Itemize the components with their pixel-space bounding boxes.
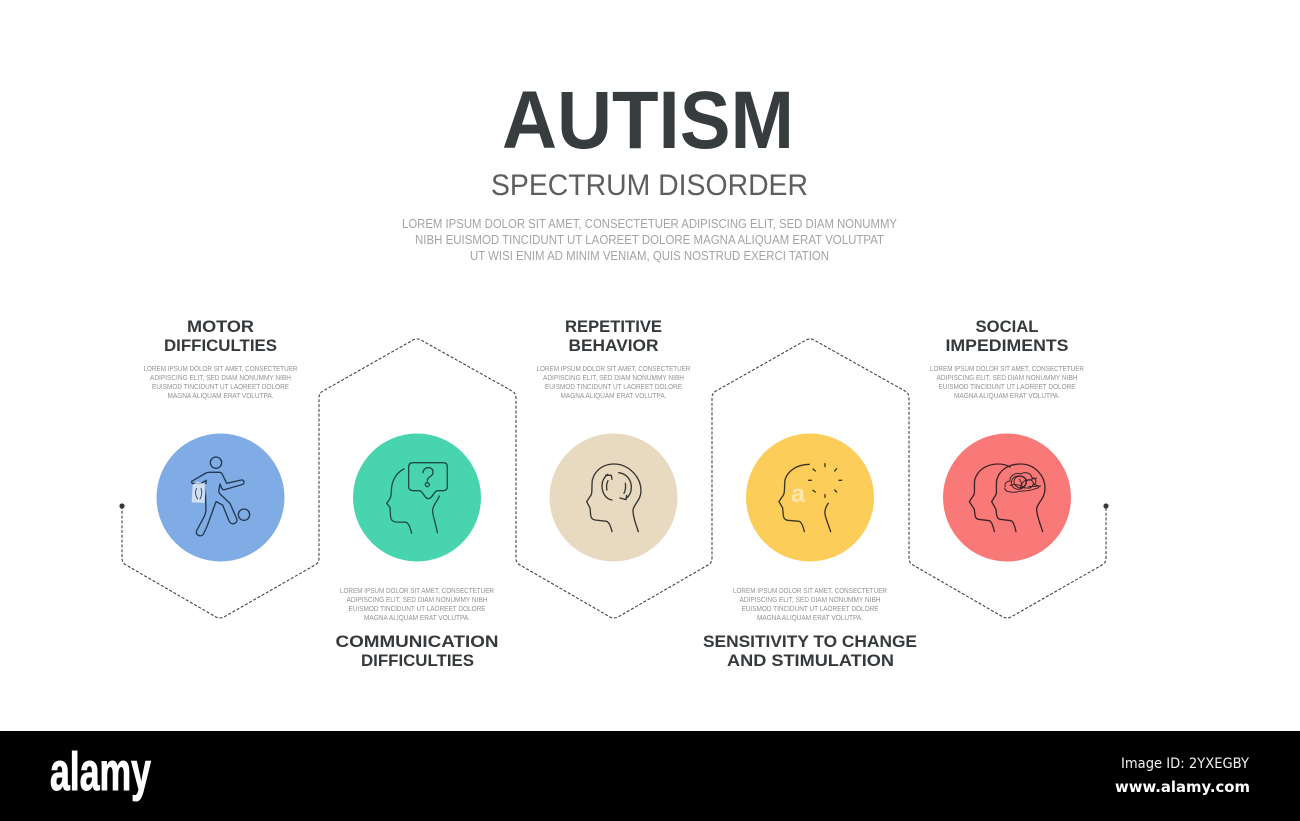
text: motor difficulties description: MAGNA ALIQUAM ERAT VOLUTPA. [168,391,274,400]
text: social impediments description: ADIPISCING ELIT, SED DIAM NONUMMY NIBH [936,373,1078,382]
icon circle: blue [156,434,284,562]
heading: social impediments [946,317,1068,355]
subtitle: SPECTRUM DISORDER [491,169,808,202]
text: communication difficulties description: LOREM IPSUM DOLOR SIT AMET, CONSECTETUER [340,586,494,595]
text: communication difficulties description: ADIPISCING ELIT, SED DIAM NONUMMY NIBH [346,595,488,604]
intro text: NIBH EUISMOD TINCIDUNT UT LAOREET DOLORE MAGNA ALIQUAM ERAT VOLUTPAT [415,232,884,247]
panel: social impediments [930,317,1084,562]
heading: motor difficulties: MOTOR [187,317,254,336]
heading: social impediments: SOCIAL [976,317,1038,336]
intro text: UT WISI ENIM AD MINIM VENIAM, QUIS NOSTRUD EXERCI TATION [470,248,829,263]
text: communication difficulties description: EUISMOD TINCIDUNT UT LAOREET DOLORE [348,604,486,613]
text: sensitivity description [733,586,887,622]
text: sensitivity description: LOREM IPSUM DOLOR SIT AMET, CONSECTETUER [733,586,887,595]
heading: repetitive behavior: BEHAVIOR [568,336,658,355]
icon circle: red [943,434,1071,562]
heading: sensitivity to change and stimulation [703,632,917,670]
text: social impediments description: MAGNA ALIQUAM ERAT VOLUTPA. [954,391,1060,400]
text: sensitivity description: ADIPISCING ELIT, SED DIAM NONUMMY NIBH [740,595,880,604]
title: AUTISM [502,75,794,166]
icon circle: yellow [746,434,874,562]
heading: communication difficulties [336,632,498,670]
text: repetitive behavior description: MAGNA ALIQUAM ERAT VOLUTPA. [560,391,667,400]
text: social impediments description: LOREM IPSUM DOLOR SIT AMET, CONSECTETUER [930,364,1084,373]
intro text [402,216,897,263]
icon: head with circular arrows [587,464,641,532]
heading: motor difficulties: DIFFICULTIES [164,336,277,355]
panel: motor difficulties [144,317,298,562]
icon circle: beige [550,434,678,562]
text: sensitivity description: MAGNA ALIQUAM ERAT VOLUTPA. [757,613,863,622]
footer bar [0,731,1300,821]
panel: repetitive behavior [536,317,690,562]
heading: social impediments: IMPEDIMENTS [946,336,1068,355]
heading: communication difficulties: COMMUNICATION [336,632,498,651]
heading: repetitive behavior [565,317,662,355]
heading: sensitivity to change and stimulation: AND STIMULATION [727,651,894,670]
watermark fragment: a [791,480,806,508]
icon: two heads with tangled thoughts [969,464,1045,532]
text: communication difficulties description: MAGNA ALIQUAM ERAT VOLUTPA. [364,613,470,622]
text: repetitive behavior description [536,364,690,400]
text: social impediments description [930,364,1084,400]
icon circle: green [353,434,481,562]
dashed hexagonal connector line [119,339,1109,618]
text: communication difficulties description [340,586,494,622]
text: social impediments description: EUISMOD TINCIDUNT UT LAOREET DOLORE [938,382,1076,391]
text: motor difficulties description [144,364,298,400]
panel: sensitivity to change and stimulation [703,434,917,670]
intro text: LOREM IPSUM DOLOR SIT AMET, CONSECTETUER ADIPISCING ELIT, SED DIAM NONUMMY [402,216,897,231]
image id: Image ID: 2YXEGBY [1121,756,1249,772]
text: motor difficulties description: ADIPISCING ELIT, SED DIAM NONUMMY NIBH [150,373,291,382]
text: motor difficulties description: LOREM IPSUM DOLOR SIT AMET, CONSECTETUER [144,364,298,373]
text: repetitive behavior description: EUISMOD TINCIDUNT UT LAOREET DOLORE [545,382,682,391]
icon: head with question bubble [387,463,447,533]
icon: running figure with ball [192,457,250,536]
text: repetitive behavior description: ADIPISCING ELIT, SED DIAM NONUMMY NIBH [543,373,684,382]
logo: alamy: alamy [50,742,151,802]
website: www.alamy.com [1115,778,1250,796]
text: repetitive behavior description: LOREM IPSUM DOLOR SIT AMET, CONSECTETUER [536,364,690,373]
heading: motor difficulties [164,317,277,355]
icon: head with radiating lines [779,464,842,532]
heading: repetitive behavior: REPETITIVE [565,317,662,336]
panel: communication difficulties [336,434,498,670]
text: sensitivity description: EUISMOD TINCIDUNT UT LAOREET DOLORE [742,604,879,613]
heading: sensitivity to change and stimulation: SENSITIVITY TO CHANGE [703,632,917,651]
text: motor difficulties description: EUISMOD TINCIDUNT UT LAOREET DOLORE [152,382,289,391]
heading: communication difficulties: DIFFICULTIES [361,651,474,670]
